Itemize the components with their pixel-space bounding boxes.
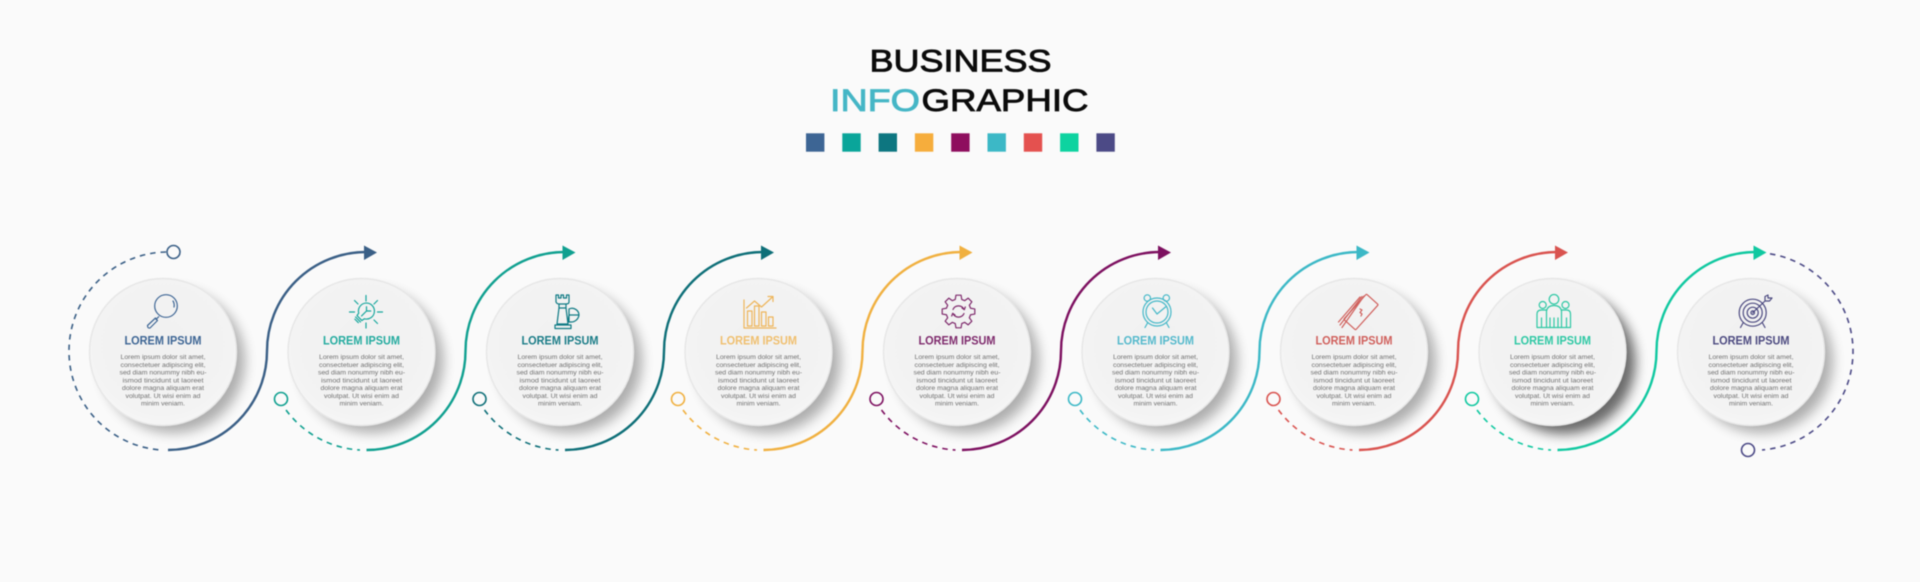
connector 6: solid curve with arrow (1160, 246, 1370, 450)
body text: volutpat. Ut wisi enim ad (1118, 393, 1193, 400)
body text: dolore magna aliquam erat (1115, 385, 1197, 392)
body text: volutpat. Ut wisi enim ad (920, 393, 995, 400)
body text: consectetuer adipiscing elit, (1510, 362, 1595, 369)
body text: Lorem ipsum dolor sit amet, (1709, 354, 1794, 361)
heading: LOREM IPSUM (124, 335, 202, 347)
heading: LOREM IPSUM (720, 335, 797, 347)
body text: consectetuer adipiscing elit, (517, 362, 603, 369)
body text: consectetuer adipiscing elit, (120, 362, 206, 369)
icon: magnifier (148, 295, 177, 328)
body text: ismod tincidunt ut laoreet (122, 378, 204, 384)
body text: ismod tincidunt ut laoreet (718, 378, 799, 384)
body text: sed diam nonummy nibh eu- (1112, 370, 1199, 377)
panel: step 3 (486, 278, 642, 433)
body text: volutpat. Ut wisi enim ad (126, 393, 201, 400)
body text: ismod tincidunt ut laoreet (1512, 378, 1593, 384)
body text: Lorem ipsum dolor sit amet, (518, 354, 603, 361)
body text: ismod tincidunt ut laoreet (321, 378, 402, 384)
connector 7: marker and dashed arc (1267, 392, 1352, 450)
connector 8: marker and dashed arc (1466, 392, 1551, 450)
body text: sed diam nonummy nibh eu- (516, 370, 604, 377)
body text: minim veniam. (736, 401, 781, 408)
panel: step 4 (685, 278, 840, 433)
panel: step 2 (288, 278, 444, 433)
body text: volutpat. Ut wisi enim ad (522, 393, 598, 400)
panel: step 5 (884, 278, 1039, 433)
connector 5: solid curve with arrow (962, 246, 1171, 450)
connector 2: solid curve with arrow (366, 246, 576, 450)
body text: Lorem ipsum dolor sit amet, (1510, 354, 1595, 361)
connector 8: solid curve with arrow (1558, 246, 1766, 450)
body text: dolore magna aliquam erat (519, 385, 601, 392)
body text: dolore magna aliquam erat (1313, 385, 1395, 392)
body text: minim veniam. (1729, 401, 1773, 408)
body text: consectetuer adipiscing elit, (1113, 362, 1198, 369)
body text: ismod tincidunt ut laoreet (1115, 378, 1196, 384)
body text: volutpat. Ut wisi enim ad (1515, 393, 1590, 400)
body text: consectetuer adipiscing elit, (319, 362, 404, 369)
body text: consectetuer adipiscing elit, (1311, 362, 1397, 369)
body text: Lorem ipsum dolor sit amet, (319, 354, 404, 361)
body text (1112, 354, 1199, 408)
body text: volutpat. Ut wisi enim ad (1316, 393, 1392, 400)
body text: sed diam nonummy nibh eu- (120, 370, 206, 377)
title line: BUSINESS: BUSINESS (870, 42, 1052, 78)
body text: sed diam nonummy nibh eu- (715, 370, 802, 377)
body text: dolore magna aliquam erat (718, 385, 800, 392)
body text: sed diam nonummy nibh eu- (1509, 370, 1596, 377)
body text: Lorem ipsum dolor sit amet, (1312, 354, 1397, 361)
connector 4: marker and dashed arc (672, 392, 757, 450)
connector 1: start marker and dashed arc (69, 246, 180, 450)
body text (1310, 354, 1398, 408)
connector 7: solid curve with arrow (1359, 246, 1568, 450)
panel: step 9 (1678, 278, 1833, 433)
body text: volutpat. Ut wisi enim ad (1714, 393, 1789, 400)
body text: dolore magna aliquam erat (321, 385, 403, 392)
title word: GRAPHIC: GRAPHIC (922, 82, 1088, 118)
body text: sed diam nonummy nibh eu- (1708, 370, 1794, 377)
body text: minim veniam. (1332, 401, 1376, 408)
connector 1: solid curve with arrow (168, 246, 377, 450)
body text: dolore magna aliquam erat (1710, 385, 1792, 392)
body text: ismod tincidunt ut laoreet (1314, 378, 1395, 384)
panel: step 6 (1082, 278, 1238, 433)
body text: sed diam nonummy nibh eu- (1310, 370, 1398, 377)
body text: Lorem ipsum dolor sit amet, (716, 354, 801, 361)
body text: Lorem ipsum dolor sit amet, (121, 354, 206, 361)
connector 3: marker and dashed arc (473, 392, 558, 450)
body text: dolore magna aliquam erat (122, 385, 204, 392)
icon: alarm clock (1143, 295, 1171, 328)
body text: minim veniam. (141, 401, 185, 408)
icon: banknotes (1338, 294, 1378, 330)
panel: step 1 (90, 278, 245, 433)
title (830, 42, 1088, 118)
body text (715, 354, 802, 408)
body text (318, 354, 405, 408)
heading: LOREM IPSUM (522, 335, 598, 347)
body text: minim veniam. (1530, 401, 1575, 408)
heading: LOREM IPSUM (323, 335, 400, 347)
icon: light bulb (350, 296, 382, 328)
body text: minim veniam. (1134, 401, 1178, 408)
connector 5: marker and dashed arc (870, 392, 956, 450)
icon: target with arrow (1739, 295, 1772, 328)
icon: chess rook and pie (555, 295, 579, 328)
body text (516, 354, 604, 408)
body text (1708, 354, 1794, 408)
heading: LOREM IPSUM (1117, 335, 1194, 347)
connector 4: solid curve with arrow (764, 246, 972, 450)
heading: LOREM IPSUM (1316, 335, 1392, 347)
body text (1509, 354, 1596, 408)
icon: growth chart (744, 296, 776, 328)
heading: LOREM IPSUM (1712, 335, 1790, 347)
title word: INFO: INFO (830, 82, 920, 118)
body text: minim veniam. (340, 401, 384, 408)
body text: consectetuer adipiscing elit, (914, 362, 1000, 369)
heading: LOREM IPSUM (1514, 335, 1591, 347)
body text: minim veniam. (538, 401, 582, 408)
body text: sed diam nonummy nibh eu- (318, 370, 405, 377)
body text: minim veniam. (935, 401, 979, 408)
body text: ismod tincidunt ut laoreet (916, 378, 998, 384)
body text: Lorem ipsum dolor sit amet, (1113, 354, 1198, 361)
colour swatches (806, 133, 1115, 152)
panel: step 8 (1479, 278, 1636, 434)
connector 3: solid curve with arrow (565, 246, 774, 450)
body text: Lorem ipsum dolor sit amet, (915, 354, 1000, 361)
connector 2: marker and dashed arc (274, 392, 360, 450)
body text: ismod tincidunt ut laoreet (1710, 378, 1792, 384)
body text: dolore magna aliquam erat (916, 385, 998, 392)
body text: consectetuer adipiscing elit, (716, 362, 801, 369)
body text (914, 354, 1000, 408)
icon: gear (942, 295, 975, 328)
body text: volutpat. Ut wisi enim ad (324, 393, 399, 400)
connector 9: end dashed arc and marker (1742, 254, 1853, 456)
heading: LOREM IPSUM (918, 335, 996, 347)
body text: volutpat. Ut wisi enim ad (721, 393, 796, 400)
body text: ismod tincidunt ut laoreet (520, 378, 601, 384)
body text: sed diam nonummy nibh eu- (914, 370, 1000, 377)
panel: step 7 (1280, 278, 1436, 433)
body text: dolore magna aliquam erat (1512, 385, 1594, 392)
icon: team of people (1537, 294, 1570, 328)
body text (120, 354, 206, 408)
body text: consectetuer adipiscing elit, (1708, 362, 1794, 369)
connector 6: marker and dashed arc (1068, 392, 1154, 450)
